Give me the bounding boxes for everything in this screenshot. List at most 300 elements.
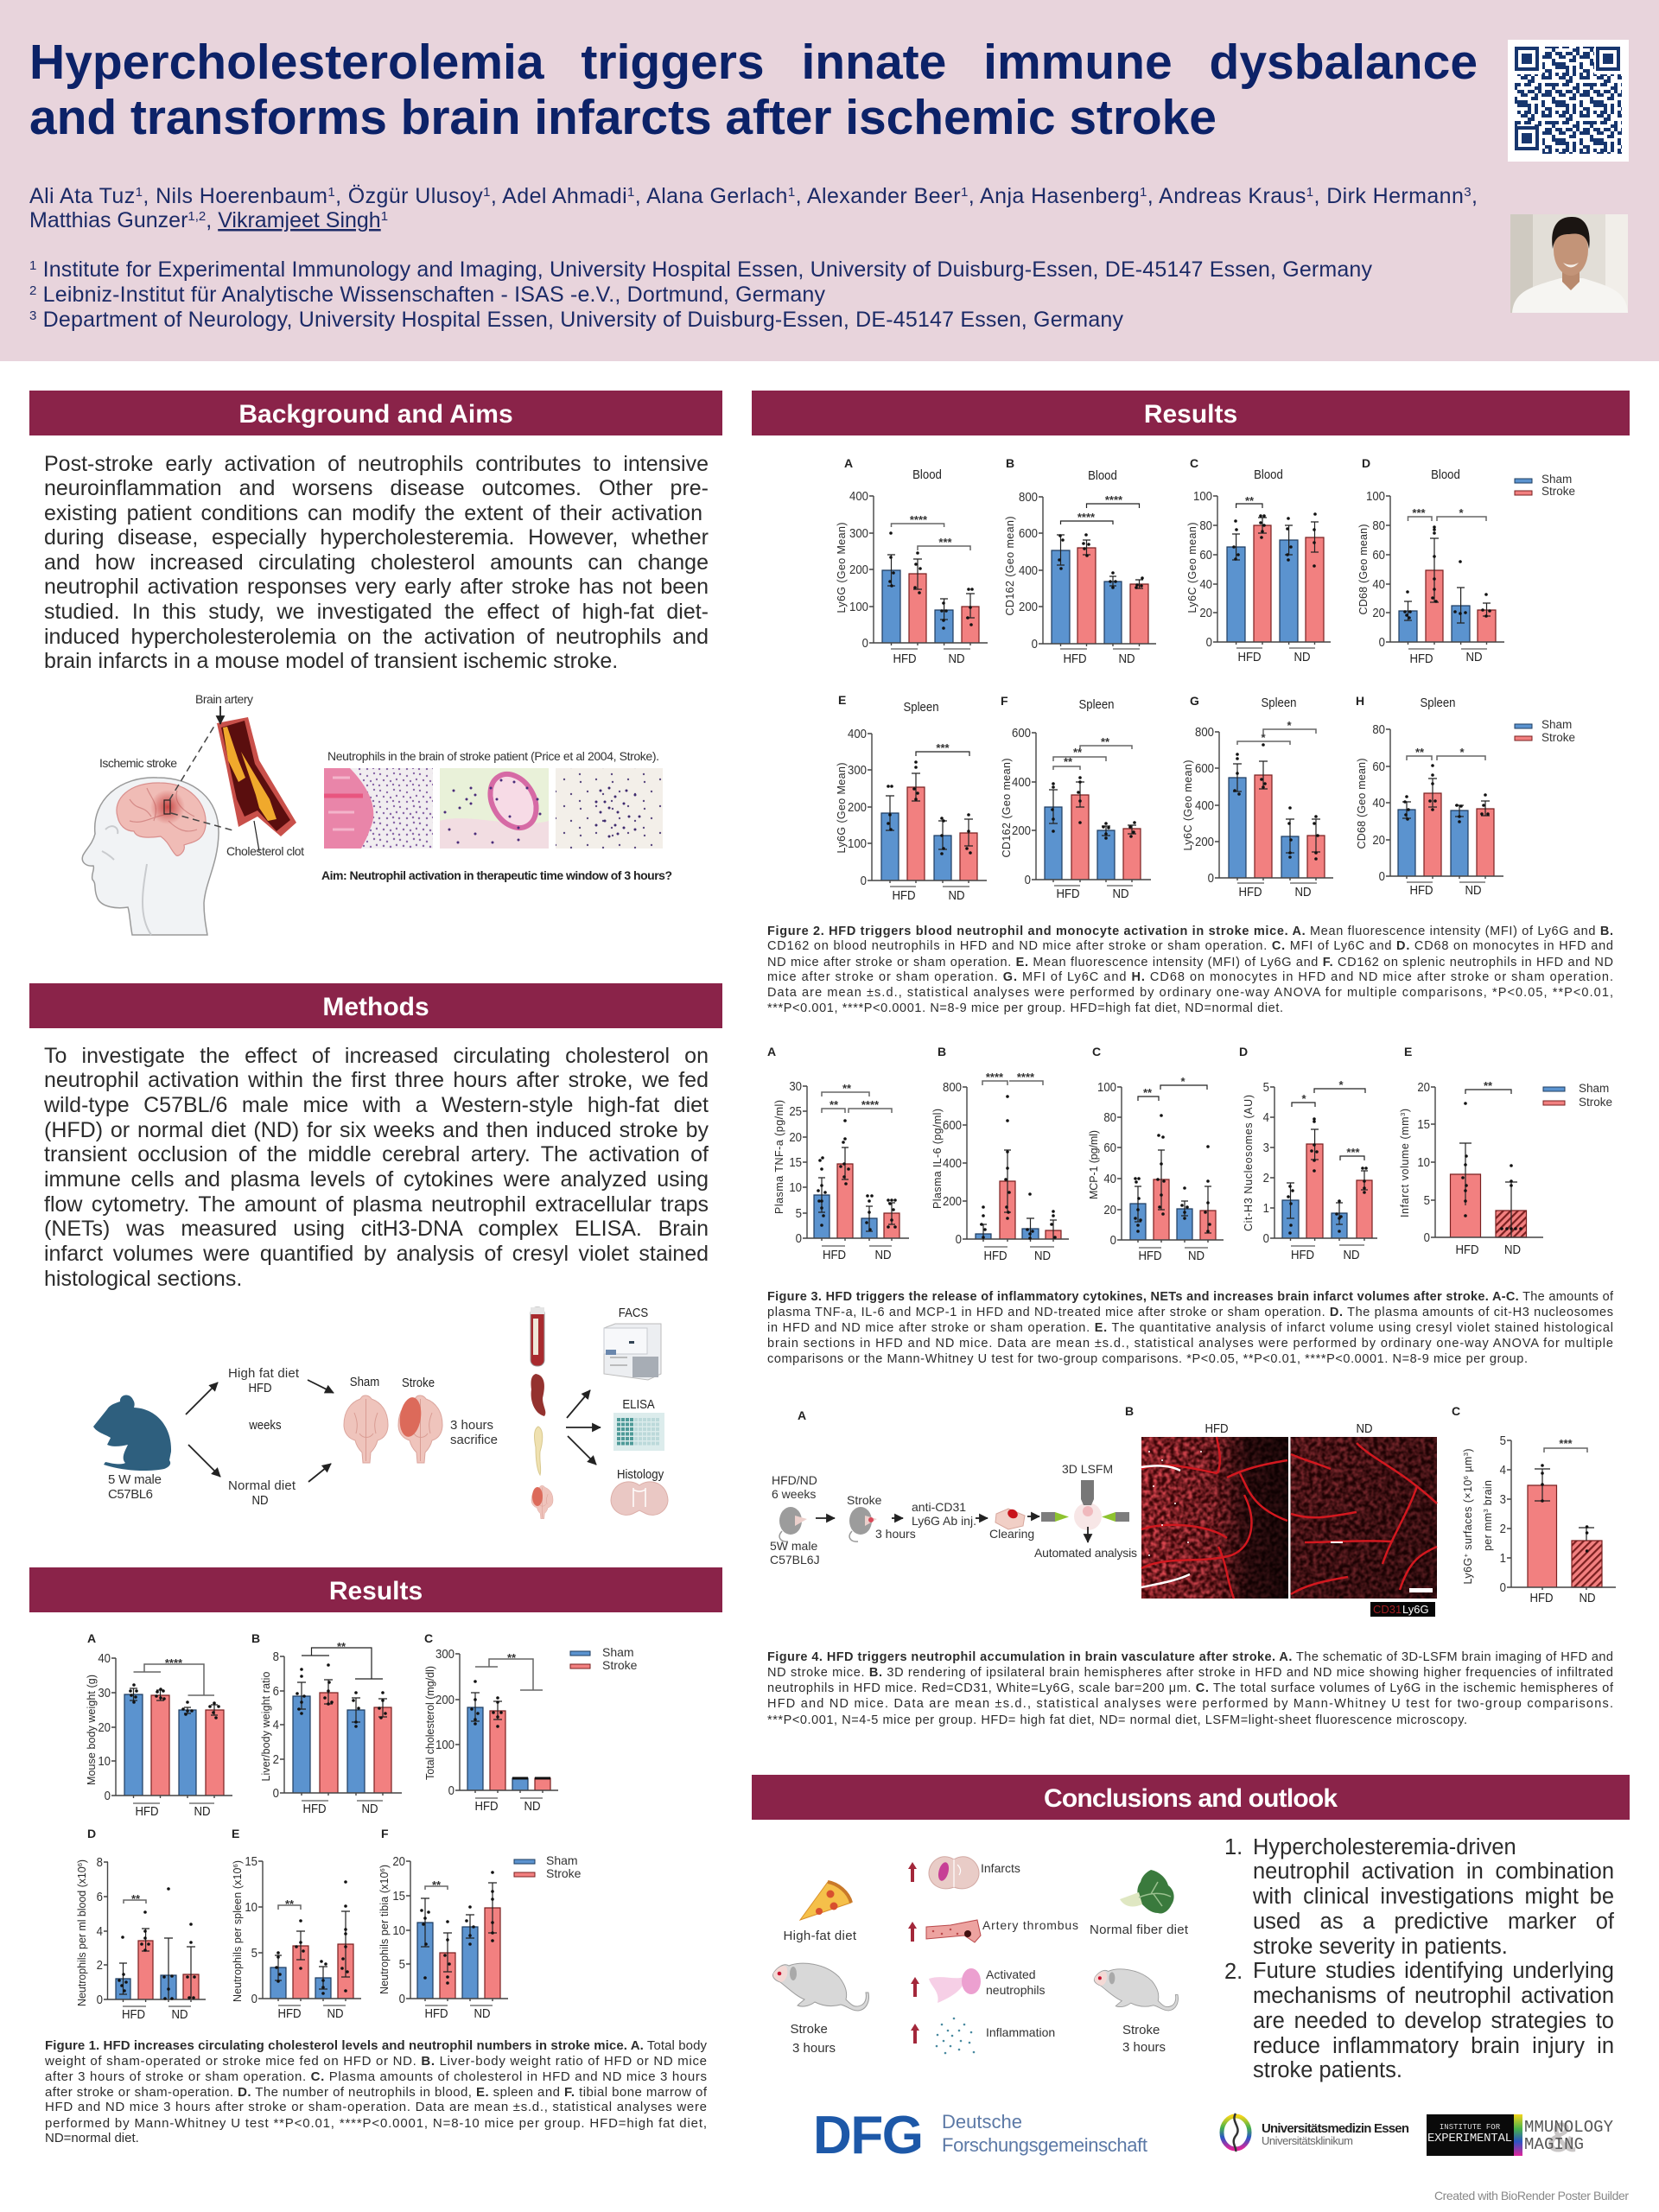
chart: 2B blood CD162: CD162 (Geo mean): [1004, 517, 1016, 615]
chart: 1B liver body weight ratio: 6: [273, 1683, 279, 1698]
caption: figure 1: performed by Mann-Whitney U test **P<0.01, ****P<0.0001, N=8-10 mice per group. HFD=high fat diet,: [45, 2116, 707, 2131]
chart: 3C plasma MCP-1: ND: [1188, 1248, 1205, 1262]
text block: background: neutrophil activation responses very early after stroke has not been: [44, 575, 709, 599]
chart: 3A plasma TNF-a: 25: [789, 1103, 802, 1118]
caption: figure 1: ND=normal diet.: [45, 2131, 139, 2145]
chart: 1B liver body weight ratio: HFD: [302, 1801, 327, 1815]
caption: figure 4: ND stroke mice. B. 3D rendering of ipsilateral brain hemispheres after stroke in HFD and ND mice showing higher frequencies of infiltrated: [767, 1666, 1613, 1680]
scale bar: [1409, 1588, 1433, 1592]
chart: 3C plasma MCP-1: [1088, 1045, 1224, 1262]
chart: 1B liver body weight ratio: ND: [361, 1801, 378, 1815]
chart: 2A blood Ly6G: [836, 456, 988, 665]
chart: 4C Ly6G surfaces: ***: [1559, 1437, 1573, 1450]
text block: methods: immune cells and plasma levels of cytokines were analyzed using: [44, 1167, 709, 1192]
logo: Institute for Experimental Immunology and Imaging: MAGING: [1524, 2135, 1584, 2154]
chart: 2G spleen Ly6C: 400: [1195, 798, 1214, 812]
chart: 2B blood CD162: 400: [1019, 563, 1038, 577]
chart: 3A plasma TNF-a: Plasma TNF-a (pg/ml): [773, 1100, 785, 1214]
chart: 2G spleen Ly6C: *: [1261, 731, 1266, 744]
label: stroke 3 hours right: Stroke: [1122, 2023, 1160, 2037]
chart: 2F spleen CD162: ND: [1112, 886, 1129, 900]
icon: leafy greens: [1120, 1870, 1174, 1914]
chart: 3E infarct volume: 20: [1417, 1079, 1430, 1094]
chart: 2A blood Ly6G: 200: [849, 562, 868, 576]
affiliations: [29, 257, 1372, 332]
graphic: conclusions summary: [772, 1857, 1189, 2056]
chart: 2F spleen CD162: F: [1001, 694, 1008, 708]
chart: 1C total cholesterol: **: [507, 1651, 517, 1664]
caption: figure 2: Figure 2. HFD triggers blood neutrophil and monocyte activation in stroke mice. A. Mean fluorescence intensity (MFI) of Ly6G and B.: [767, 925, 1613, 938]
caption: figure 3: comparisons or the Mann-Whitney U test for two-group comparisons. *P<0.05, **P<0.01, ****P<0.0001. N=8-9 mice per group.: [767, 1352, 1528, 1366]
chart: 4C Ly6G surfaces: 4: [1500, 1462, 1506, 1477]
text block: methods: flow cytometry. The amount of plasma neutrophil extracellular traps: [44, 1192, 709, 1217]
icon: mouse: [779, 1507, 807, 1541]
chart: 2C blood Ly6C: 80: [1199, 518, 1212, 532]
text block: methods: histological sections.: [44, 1267, 242, 1291]
chart: 1A mouse body weight: 40: [98, 1650, 111, 1665]
chart: 3D Cit-H3 nucleosomes: *: [1301, 1092, 1306, 1105]
chart: 1B liver body weight ratio: Liver/body weight ratio: [260, 1671, 272, 1782]
micrograph 3: [556, 768, 663, 849]
chart: 2A blood Ly6G: 400: [849, 488, 868, 503]
label: FACS: FACS: [619, 1305, 648, 1319]
chart: 2H spleen CD68: ND: [1465, 882, 1482, 897]
chart: 2H spleen CD68: Spleen: [1420, 695, 1456, 709]
logo: DFG: DFG: [813, 2106, 924, 2165]
chart: 2E spleen Ly6G: 0: [861, 873, 867, 887]
chart: 1A mouse body weight: [86, 1631, 232, 1818]
legend: figure 1 bottom: [514, 1853, 582, 1880]
aim statement: Aim: Neutrophil activation in therapeutic time window of 3 hours?: [321, 868, 672, 882]
chart: 3D Cit-H3 nucleosomes: ND: [1343, 1247, 1360, 1262]
chart: 1A mouse body weight: 20: [98, 1719, 111, 1734]
chart: 2G spleen Ly6C: Ly6C (Geo mean): [1182, 760, 1194, 850]
figure 1 charts: [76, 1631, 638, 2021]
chart: 3C plasma MCP-1: 20: [1103, 1202, 1116, 1217]
icon: infarct brain: [929, 1857, 979, 1889]
legend: figure 2 top: [1515, 473, 1575, 498]
caption: figure 3: plasma TNF-a, IL-6 and MCP-1 in HFD and ND-treated mice after stroke or sham operation. D. The plasma amounts of cit-H3 nucleosomes: [767, 1306, 1613, 1319]
logo: Institute for Experimental Immunology and Imaging: INSTITUTE FOR: [1440, 2123, 1501, 2132]
caption: figure 3: [767, 1290, 1614, 1366]
legend: figure 1 top: [570, 1645, 638, 1672]
caption: figure 4: [767, 1650, 1614, 1727]
chart: 2E spleen Ly6G: ND: [948, 887, 965, 902]
channel key: [1370, 1602, 1435, 1617]
chart: 3E infarct volume: Infarct volume (mm3): [1398, 1109, 1411, 1217]
text block: background: Post-stroke early activation of neutrophils contributes to intensive: [44, 451, 709, 475]
chart: 3A plasma TNF-a: 20: [789, 1129, 802, 1144]
chart: 2D blood CD68: 60: [1372, 547, 1385, 562]
chart: 2D blood CD68: [1357, 456, 1504, 665]
chart: 2F spleen CD162: CD162 (Geo mean): [1001, 759, 1013, 857]
chart: 3B plasma IL-6: Plasma IL-6 (pg/ml): [931, 1109, 944, 1209]
caption: figure 1: [44, 2038, 708, 2145]
arrows: increases: [908, 1862, 919, 2044]
chart: 1D neutrophils per ml blood: 8: [97, 1854, 103, 1869]
label: stroke 3 hours left: 3 hours: [792, 2041, 836, 2056]
chart: 1D neutrophils per ml blood: **: [131, 1892, 141, 1905]
schematic: 3D-LSFM workflow: 6 weeks: [772, 1487, 816, 1501]
chart: 3A plasma TNF-a: ND: [874, 1247, 892, 1262]
text block: methods: (NETs) was measured using citH3-DNA complex ELISA. Brain: [44, 1217, 709, 1241]
chart: 2D blood CD68: 20: [1372, 605, 1385, 620]
icon: brain section: [611, 1482, 668, 1515]
chart: 2A blood Ly6G: 0: [862, 635, 868, 650]
chart: 2E spleen Ly6G: Spleen: [903, 699, 939, 714]
chart: 2A blood Ly6G: 100: [849, 599, 868, 613]
icon: brain: [117, 783, 206, 855]
chart: 1E neutrophils per spleen: 10: [245, 1899, 257, 1914]
micrograph: HFD: [1141, 1437, 1288, 1599]
icon: mouse silhouette: [93, 1395, 171, 1471]
caption: figure 4: neutrophils in HFD mice. Red=CD31, White=Ly6G, scale bar=200 μm. C. The total surface volumes of Ly6G in the ischemic hemispheres of: [767, 1681, 1614, 1695]
chart: 3E infarct volume: **: [1484, 1079, 1493, 1092]
label: high-fat diet: High-fat diet: [783, 1929, 857, 1943]
icon: activated neutrophil: [929, 1968, 981, 2003]
chart: 2B blood CD162: ND: [1118, 651, 1135, 665]
chart: 2D blood CD68: ND: [1465, 649, 1483, 664]
chart: 1F neutrophils per tibia: 5: [399, 1956, 405, 1971]
chart: 2C blood Ly6C: 60: [1199, 547, 1212, 562]
micrograph 2: [440, 766, 549, 849]
chart: 2D blood CD68: HFD: [1409, 651, 1433, 665]
schematic: 3D-LSFM workflow: 5W male: [770, 1539, 817, 1553]
chart: 2E spleen Ly6G: 100: [848, 836, 867, 850]
micrographs: brain vasculature: HFD: [1205, 1421, 1229, 1435]
chart: 3D Cit-H3 nucleosomes: *: [1338, 1078, 1344, 1091]
chart: 3C plasma MCP-1: 100: [1097, 1079, 1116, 1094]
caption: figure 4: HFD and ND mice. Data are mean ±s.d., statistical analyses were performed by Mann-Whitney U test for two-group comparisons.: [767, 1697, 1613, 1711]
caption: figure 4: Figure 4. HFD triggers neutrophil accumulation in brain vasculature after stroke. A. The schematic of 3D-LSFM brain imaging of HFD and: [767, 1650, 1613, 1664]
logo: Universitaetsmedizin Essen: [1222, 2113, 1409, 2152]
text block: methods: [44, 1044, 709, 1294]
schematic: 3D-LSFM workflow: Clearing: [989, 1527, 1034, 1541]
chart: 2B blood CD162: [1004, 456, 1156, 665]
chart: 3C plasma MCP-1: 40: [1103, 1171, 1116, 1185]
chart: 3A plasma TNF-a: HFD: [823, 1247, 846, 1262]
chart: 4C Ly6G surfaces: C: [1452, 1404, 1460, 1418]
label: 3 hours sacrifice: 3 hours: [450, 1418, 493, 1433]
chart: 3D Cit-H3 nucleosomes: 5: [1263, 1079, 1269, 1094]
chart: 1B liver body weight ratio: B: [251, 1631, 260, 1645]
chart: 3A plasma TNF-a: A: [767, 1045, 776, 1058]
chart: 2C blood Ly6C: C: [1190, 456, 1198, 470]
chart: 1C total cholesterol: Total cholesterol (mg/dl): [424, 1666, 436, 1780]
icon: inflammation dots: [937, 2018, 974, 2053]
chart: 1A mouse body weight: HFD: [135, 1803, 159, 1818]
chart: 1B liver body weight ratio: **: [337, 1640, 346, 1653]
legend: figure 2 bottom: [1515, 718, 1575, 744]
label: stroke 3 hours right: [1122, 2023, 1166, 2055]
text block: background: studied. In this study, we investigated the effect of high-fat diet-: [44, 600, 709, 624]
chart: 2C blood Ly6C: 0: [1206, 634, 1212, 649]
chart: 3D Cit-H3 nucleosomes: 1: [1263, 1200, 1269, 1215]
chart: 1B liver body weight ratio: 0: [273, 1785, 279, 1800]
chart: 4C Ly6G surfaces: per mm3 brain: [1481, 1480, 1494, 1551]
chart: 2H spleen CD68: 20: [1372, 832, 1385, 847]
authors: Ali Ata Tuz1, Nils Hoerenbaum1, Özgür Ulusoy1, Adel Ahmadi1, Alana Gerlach1, Alexander Beer1, Anja Hasenberg1, Andreas Kraus1, Dirk Hermann3,: [29, 184, 1478, 208]
schematic: 3D-LSFM workflow: Stroke: [847, 1493, 882, 1507]
chart: 1E neutrophils per spleen: E: [232, 1827, 239, 1840]
legend: figure 2 top: Stroke: [1541, 485, 1575, 498]
chart: 2A blood Ly6G: 300: [849, 525, 868, 540]
label: mouse strain: 5 W male: [108, 1472, 162, 1487]
chart: 3B plasma IL-6: HFD: [983, 1248, 1007, 1262]
chart: 1A mouse body weight: Mouse body weight (g): [86, 1675, 98, 1785]
heading: Results right: Results: [1144, 400, 1237, 429]
chart: 1E neutrophils per spleen: 15: [245, 1853, 257, 1868]
text block: conclusions list: Future studies identifying underlying: [1253, 1959, 1614, 1983]
chart: 2H spleen CD68: 0: [1379, 868, 1385, 883]
legend: figure 1 bottom: Sham: [546, 1853, 578, 1867]
schematic: 3D-LSFM workflow: C57BL6J: [770, 1553, 820, 1567]
chart: 2E spleen Ly6G: Ly6G (Geo Mean): [836, 762, 848, 854]
chart: 3A plasma TNF-a: 30: [789, 1078, 802, 1093]
chart: 2D blood CD68: 40: [1372, 576, 1385, 591]
chart: 1D neutrophils per ml blood: Neutrophils per ml blood (x106): [76, 1859, 88, 2006]
chart: 2H spleen CD68: [1356, 694, 1503, 897]
chart: 2H spleen CD68: 80: [1372, 721, 1385, 736]
chart: 1D neutrophils per ml blood: [76, 1827, 206, 2021]
caption: figure 2: Data are mean ±s.d., statistical analyses were performed by ordinary one-way ANOVA for multiple comparisons, *P<0.05, **P<0.01,: [767, 986, 1613, 1000]
chart: 3D Cit-H3 nucleosomes: [1239, 1045, 1377, 1262]
caption: figure 2: [767, 925, 1613, 1015]
text block: conclusions list: Hypercholesteremia-driven: [1253, 1835, 1516, 1859]
chart: 1A mouse body weight: A: [87, 1631, 96, 1645]
chart: 3D Cit-H3 nucleosomes: 0: [1263, 1230, 1269, 1245]
heading: Results left: Results: [329, 1577, 423, 1605]
chart: 2H spleen CD68: HFD: [1409, 882, 1433, 897]
chart: 3C plasma MCP-1: 60: [1103, 1140, 1116, 1154]
text block: conclusions list: used as a predictive marker of: [1253, 1910, 1614, 1934]
chart: 3B plasma IL-6: 200: [943, 1193, 962, 1208]
chart: 3C plasma MCP-1: *: [1180, 1075, 1185, 1088]
text block: background: during disease, especially hypercholesteremia. However, whether: [44, 525, 709, 550]
label: high fat diet: High fat diet: [228, 1366, 300, 1381]
chart: 2E spleen Ly6G: E: [838, 693, 846, 707]
chart: 2F spleen CD162: 400: [1012, 774, 1031, 789]
chart: 3C plasma MCP-1: HFD: [1138, 1248, 1162, 1262]
chart: 1D neutrophils per ml blood: HFD: [122, 2006, 145, 2021]
chart: 2B blood CD162: 600: [1019, 525, 1038, 540]
chart: 4C Ly6G surfaces: 1: [1500, 1550, 1506, 1565]
chart: 3B plasma IL-6: ****: [986, 1071, 1004, 1084]
chart: 2A blood Ly6G: Blood: [912, 467, 942, 481]
chart: 1D neutrophils per ml blood: 0: [97, 1992, 103, 2006]
chart: 2D blood CD68: CD68 (Geo mean): [1357, 524, 1370, 615]
icon: stroke mouse: [849, 1507, 877, 1541]
graphic: conclusions summary: Normal fiber diet: [1090, 1923, 1189, 1937]
text block: conclusions list: stroke patients.: [1253, 2058, 1402, 2082]
chart: 2H spleen CD68: CD68 (Geo mean): [1356, 759, 1368, 849]
caption: figure 4: ***P<0.001, N=4-5 mice per group. HFD= high fat diet, ND= normal diet, LSFM=light-sheet fluorescence microscopy.: [767, 1713, 1467, 1727]
chart: 4C Ly6G surfaces: 0: [1500, 1580, 1506, 1594]
graphic: conclusions summary: Artery thrombus: [982, 1918, 1078, 1932]
chart: 2D blood CD68: 0: [1379, 634, 1385, 649]
chart: 3C plasma MCP-1: MCP-1 (pg/ml): [1088, 1130, 1100, 1199]
chart: 3B plasma IL-6: [931, 1045, 1069, 1262]
label: histology: Histology: [617, 1466, 664, 1481]
chart: 1D neutrophils per ml blood: 2: [97, 1957, 103, 1972]
chart: 2C blood Ly6C: **: [1245, 494, 1255, 507]
chart: 1A mouse body weight: ND: [194, 1803, 211, 1818]
schematic: 3D-LSFM workflow: HFD/ND: [772, 1473, 817, 1487]
chart: 1D neutrophils per ml blood: D: [87, 1827, 96, 1840]
label: brain artery: Brain artery: [195, 692, 253, 706]
label: stroke 3 hours left: Stroke: [790, 2022, 828, 2037]
icon: stroke mouse left: [772, 1963, 869, 2011]
micrographs: neutrophils in stroke brain: [321, 749, 672, 882]
chart: 2A blood Ly6G: HFD: [893, 651, 917, 665]
caption: figure 2: CD162 on blood neutrophils in HFD and ND mice after stroke or sham operation. C. MFI of Ly6C and D. CD68 on monocytes in HFD and: [767, 939, 1613, 953]
graphic: conclusions summary: Inflammation: [986, 2025, 1055, 2039]
text block: methods: transient occlusion of the middle cerebral artery. The activation of: [44, 1142, 709, 1166]
diagram: experimental design: sacrifice: [450, 1433, 498, 1447]
chart: 1D neutrophils per ml blood: 6: [97, 1889, 103, 1904]
title: Hypercholesterolemia triggers innate immune dysbalance: [29, 35, 1478, 90]
schematic: 3D-LSFM workflow: anti-CD31: [912, 1500, 966, 1514]
label: sham: Sham: [350, 1374, 379, 1389]
chart: 2C blood Ly6C: 20: [1199, 605, 1212, 620]
chart: 2F spleen CD162: 600: [1012, 725, 1031, 740]
label: cholesterol clot: Cholesterol clot: [226, 844, 304, 858]
chart: 2E spleen Ly6G: ***: [936, 741, 950, 754]
icon: head profile: [82, 778, 219, 935]
chart: 3E infarct volume: ND: [1504, 1242, 1521, 1256]
chart: 2D blood CD68: ***: [1412, 506, 1427, 519]
chart: 1E neutrophils per spleen: **: [285, 1897, 295, 1910]
authors: Matthias Gunzer1,2, Vikramjeet Singh1: [29, 208, 388, 232]
micrographs: brain vasculature: ND: [1356, 1421, 1373, 1435]
chart: 2A blood Ly6G: ****: [910, 513, 928, 526]
chart: 1C total cholesterol: 100: [435, 1737, 454, 1751]
text block: background: induced hypercholesterolemia on the activation of neutrophils and: [44, 625, 709, 649]
chart: 2E spleen Ly6G: HFD: [892, 887, 916, 902]
chart: 3A plasma TNF-a: [767, 1045, 909, 1262]
caption: figure 3: Figure 3. HFD triggers the release of inflammatory cytokines, NETs and increases brain infarct volumes after stroke. A-C. The amounts of: [767, 1290, 1614, 1304]
text block: conclusions list: neutrophil activation in combination: [1253, 1859, 1614, 1884]
chart: 2F spleen CD162: 200: [1012, 823, 1031, 837]
legend: figure 2 bottom: Stroke: [1541, 731, 1575, 744]
chart: 1D neutrophils per ml blood: ND: [171, 2006, 188, 2021]
icon: artery with clot: [217, 717, 296, 836]
chart: 2G spleen Ly6C: G: [1190, 694, 1199, 708]
chart: 3D Cit-H3 nucleosomes: HFD: [1291, 1247, 1314, 1262]
chart: 1C total cholesterol: HFD: [474, 1798, 499, 1813]
chart: 2B blood CD162: 200: [1019, 599, 1038, 613]
chart: 3E infarct volume: E: [1404, 1045, 1412, 1058]
chart: 1F neutrophils per tibia: HFD: [424, 2005, 448, 2020]
legend: figure 3: Stroke: [1579, 1096, 1612, 1109]
chart: 4C Ly6G surfaces: 5: [1500, 1433, 1506, 1447]
chart: 2D blood CD68: 100: [1366, 488, 1385, 503]
text block: conclusions list: are needed to develop strategies to: [1253, 2009, 1614, 2033]
label: ischemic stroke: Ischemic stroke: [99, 756, 177, 770]
schematic: 3D-LSFM workflow: 3 hours: [875, 1527, 916, 1541]
chart: 2B blood CD162: ****: [1105, 493, 1123, 506]
chart: 1E neutrophils per spleen: [232, 1827, 361, 2020]
chart: 1F neutrophils per tibia: 15: [392, 1888, 405, 1903]
chart: 1F neutrophils per tibia: 20: [392, 1853, 405, 1868]
icon: pizza slice: [800, 1882, 851, 1920]
micrograph: ND: [1291, 1437, 1437, 1599]
chart: 3A plasma TNF-a: 0: [796, 1230, 802, 1245]
label: stroke 3 hours left: [790, 2022, 836, 2056]
chart: 1C total cholesterol: 200: [435, 1692, 454, 1707]
chart: 2G spleen Ly6C: HFD: [1238, 884, 1262, 899]
chart: 3A plasma TNF-a: **: [842, 1082, 852, 1095]
title: and transforms brain infarcts after ischemic stroke: [29, 90, 1217, 145]
caption: figure 1: Figure 1. HFD increases circulating cholesterol levels and neutrophil numbers in stroke mice. A. Total body: [45, 2038, 707, 2053]
chart: 2G spleen Ly6C: 0: [1208, 870, 1214, 885]
chart: 1E neutrophils per spleen: Neutrophils per spleen (x106): [232, 1860, 244, 2002]
icon: light-sheet microscope: [1041, 1480, 1129, 1530]
logo: DFG: Deutsche: [942, 2111, 1022, 2133]
portrait photo: [1510, 214, 1628, 313]
affiliations: 2 Leibniz-Institut für Analytische Wissenschaften - ISAS -e.V., Dortmund, Germany: [29, 283, 826, 307]
chart: 2E spleen Ly6G: 400: [848, 726, 867, 741]
chart: 3B plasma IL-6: B: [938, 1045, 946, 1058]
list numbers: 2.: [1224, 1960, 1243, 1984]
chart: 3D Cit-H3 nucleosomes: ***: [1346, 1146, 1361, 1159]
text block: background: neuroinflammation and worsens disease outcomes. Other pre-: [44, 476, 709, 500]
chart: 2G spleen Ly6C: 600: [1195, 760, 1214, 775]
chart: 1E neutrophils per spleen: HFD: [277, 2005, 302, 2020]
chart: 2A blood Ly6G: A: [844, 456, 853, 470]
icon: blood tube: [531, 1307, 544, 1366]
chart: 3D Cit-H3 nucleosomes: 4: [1263, 1109, 1269, 1124]
legend: figure 3: [1543, 1082, 1612, 1109]
chart: 1E neutrophils per spleen: 5: [251, 1945, 257, 1960]
heading: Methods: [29, 983, 722, 1028]
text block: conclusions list: reduce inflammatory brain injury in: [1253, 2034, 1614, 2058]
chart: 1A mouse body weight: 0: [105, 1788, 111, 1802]
diagram: experimental design: C57BL6: [108, 1487, 153, 1502]
chart: 3C plasma MCP-1: 80: [1103, 1109, 1116, 1124]
chart: 3A plasma TNF-a: **: [830, 1098, 839, 1111]
chart: 1F neutrophils per tibia: Neutrophils per tibia (x106): [378, 1865, 391, 1994]
diagram: experimental design: ND: [251, 1492, 269, 1507]
figure 3 charts: [767, 1045, 1612, 1262]
chart: 3C plasma MCP-1: 0: [1110, 1232, 1116, 1247]
heading: Background and Aims: [29, 391, 722, 435]
logo: DFG: Forschungsgemeinschaft: [942, 2134, 1147, 2156]
chart: 2D blood CD68: 80: [1372, 518, 1385, 532]
micrograph 1: [324, 768, 433, 849]
legend: figure 3: Sham: [1579, 1082, 1609, 1095]
schematic: 3D-LSFM workflow: Automated analysis: [1034, 1546, 1137, 1560]
channel key: Ly6G: [1402, 1603, 1429, 1616]
figure 2 charts: [836, 456, 1575, 902]
chart: 1C total cholesterol: C: [424, 1631, 433, 1645]
authors: [29, 184, 1478, 232]
icon: sham brain: [344, 1395, 388, 1463]
figure 4: [770, 1404, 1616, 1617]
chart: 1F neutrophils per tibia: [378, 1827, 508, 2020]
caption: neutrophils: Neutrophils in the brain of stroke patient (Price et al 2004, Stroke).: [327, 749, 659, 763]
label: normal diet: Normal diet: [228, 1478, 296, 1493]
list numbers: 1.: [1224, 1835, 1243, 1859]
chart: 2C blood Ly6C: HFD: [1237, 649, 1262, 664]
chart: 4C Ly6G surfaces: 2: [1500, 1521, 1506, 1535]
micrographs: brain vasculature: [1125, 1404, 1437, 1617]
chart: 1A mouse body weight: ****: [165, 1656, 183, 1669]
chart: 3A plasma TNF-a: 15: [789, 1154, 802, 1169]
chart: 2B blood CD162: 0: [1032, 636, 1038, 651]
chart: 2G spleen Ly6C: 800: [1195, 724, 1214, 739]
text block: background: and how increased circulating cholesterol amounts can change: [44, 550, 709, 575]
